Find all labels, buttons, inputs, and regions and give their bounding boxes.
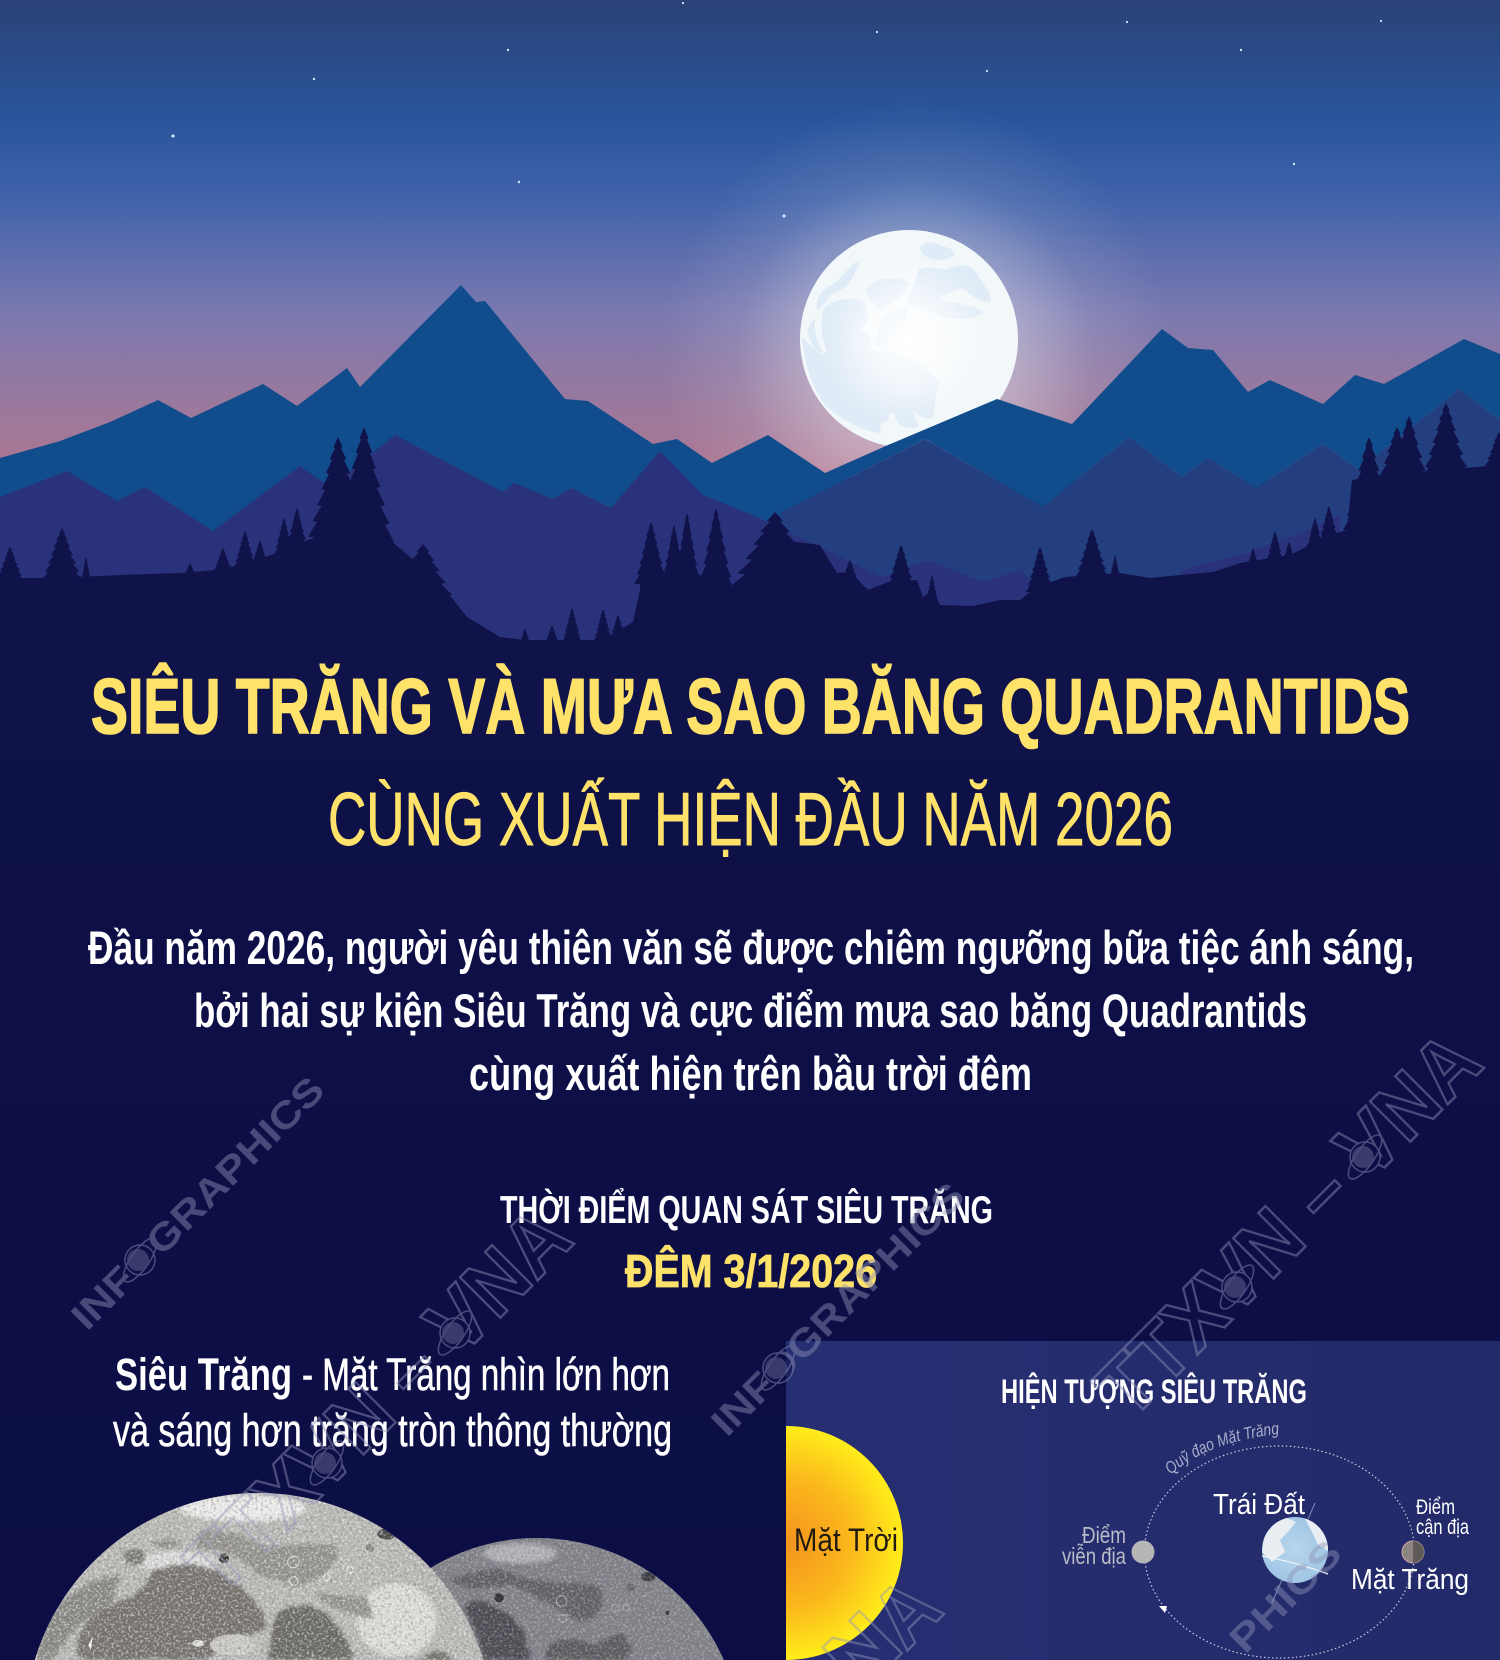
- watermark TTXVN left: TTXVN – VNA: [167, 1189, 588, 1611]
- watermarks: [64, 1013, 1498, 1660]
- slate mountain range: [780, 389, 1500, 640]
- intro paragraph: [88, 921, 1414, 1100]
- ground: [0, 465, 1500, 760]
- sun: [786, 1426, 903, 1660]
- super moon: [34, 1493, 484, 1660]
- watermark INFOGRAPHICS right: PHICS: [1222, 1533, 1350, 1660]
- panel background: [786, 1341, 1500, 1660]
- forest silhouette: [0, 403, 1500, 760]
- supermoon description: [113, 1349, 672, 1456]
- perigee label: [1416, 1496, 1469, 1539]
- watermark INFOGRAPHICS center: INFOGRAPHICS: [704, 1175, 973, 1444]
- night sky hero: [0, 0, 1500, 610]
- observation label: THỜI ĐIỂM QUAN SÁT SIÊU TRĂNG: [500, 1187, 993, 1232]
- watermark globes: [118, 1131, 1387, 1489]
- watermark INFOGRAPHICS left: INFOGRAPHICS: [64, 1069, 333, 1338]
- observation date: ĐÊM 3/1/2026: [625, 1245, 877, 1297]
- front mountain range left of slate: [0, 285, 1500, 640]
- earth label: Trái Đất: [1213, 1489, 1305, 1521]
- apogee moon: [1132, 1540, 1154, 1564]
- perigee label: Điểm: [1416, 1496, 1455, 1519]
- moon orbit: [1144, 1446, 1414, 1658]
- sky gradient: [0, 0, 1500, 480]
- panel heading: HIỆN TƯỢNG SIÊU TRĂNG: [1001, 1373, 1307, 1411]
- perigee moon: [1402, 1541, 1424, 1563]
- earth axis: [1272, 1503, 1315, 1603]
- intro paragraph: cùng xuất hiện trên bầu trời đêm: [469, 1047, 1032, 1100]
- title line 2: CÙNG XUẤT HIỆN ĐẦU NĂM 2026: [328, 777, 1173, 861]
- purple hillside right: [1180, 515, 1340, 580]
- orbit label: Quỹ đạo Mặt Trăng: [1166, 1424, 1278, 1474]
- moon comparison photo: [34, 1493, 724, 1660]
- supermoon description: Siêu Trăng: [115, 1349, 292, 1400]
- earth: [1262, 1517, 1330, 1583]
- full moon: [800, 230, 1018, 448]
- supermoon description: - Mặt Trăng nhìn lớn hơn: [302, 1349, 670, 1400]
- apogee label: viễn địa: [1062, 1543, 1126, 1569]
- stars: [171, 2, 1382, 218]
- moon label: Mặt Trăng: [1351, 1564, 1469, 1596]
- apogee label: Điểm: [1082, 1522, 1126, 1548]
- observation time: [500, 1187, 993, 1297]
- orbit direction arrow: [1159, 1606, 1167, 1613]
- purple mountain range: [0, 435, 1040, 660]
- title: [91, 662, 1410, 861]
- moon glow: [660, 100, 1170, 610]
- supermoon description: và sáng hơn trăng tròn thông thường: [113, 1405, 672, 1456]
- sun label: Mặt Trời: [794, 1522, 898, 1558]
- apogee label: [1062, 1522, 1126, 1569]
- regular moon: [430, 1538, 724, 1660]
- panel: supermoon phenomenon: [786, 1341, 1500, 1660]
- perigee label: cận địa: [1416, 1516, 1469, 1539]
